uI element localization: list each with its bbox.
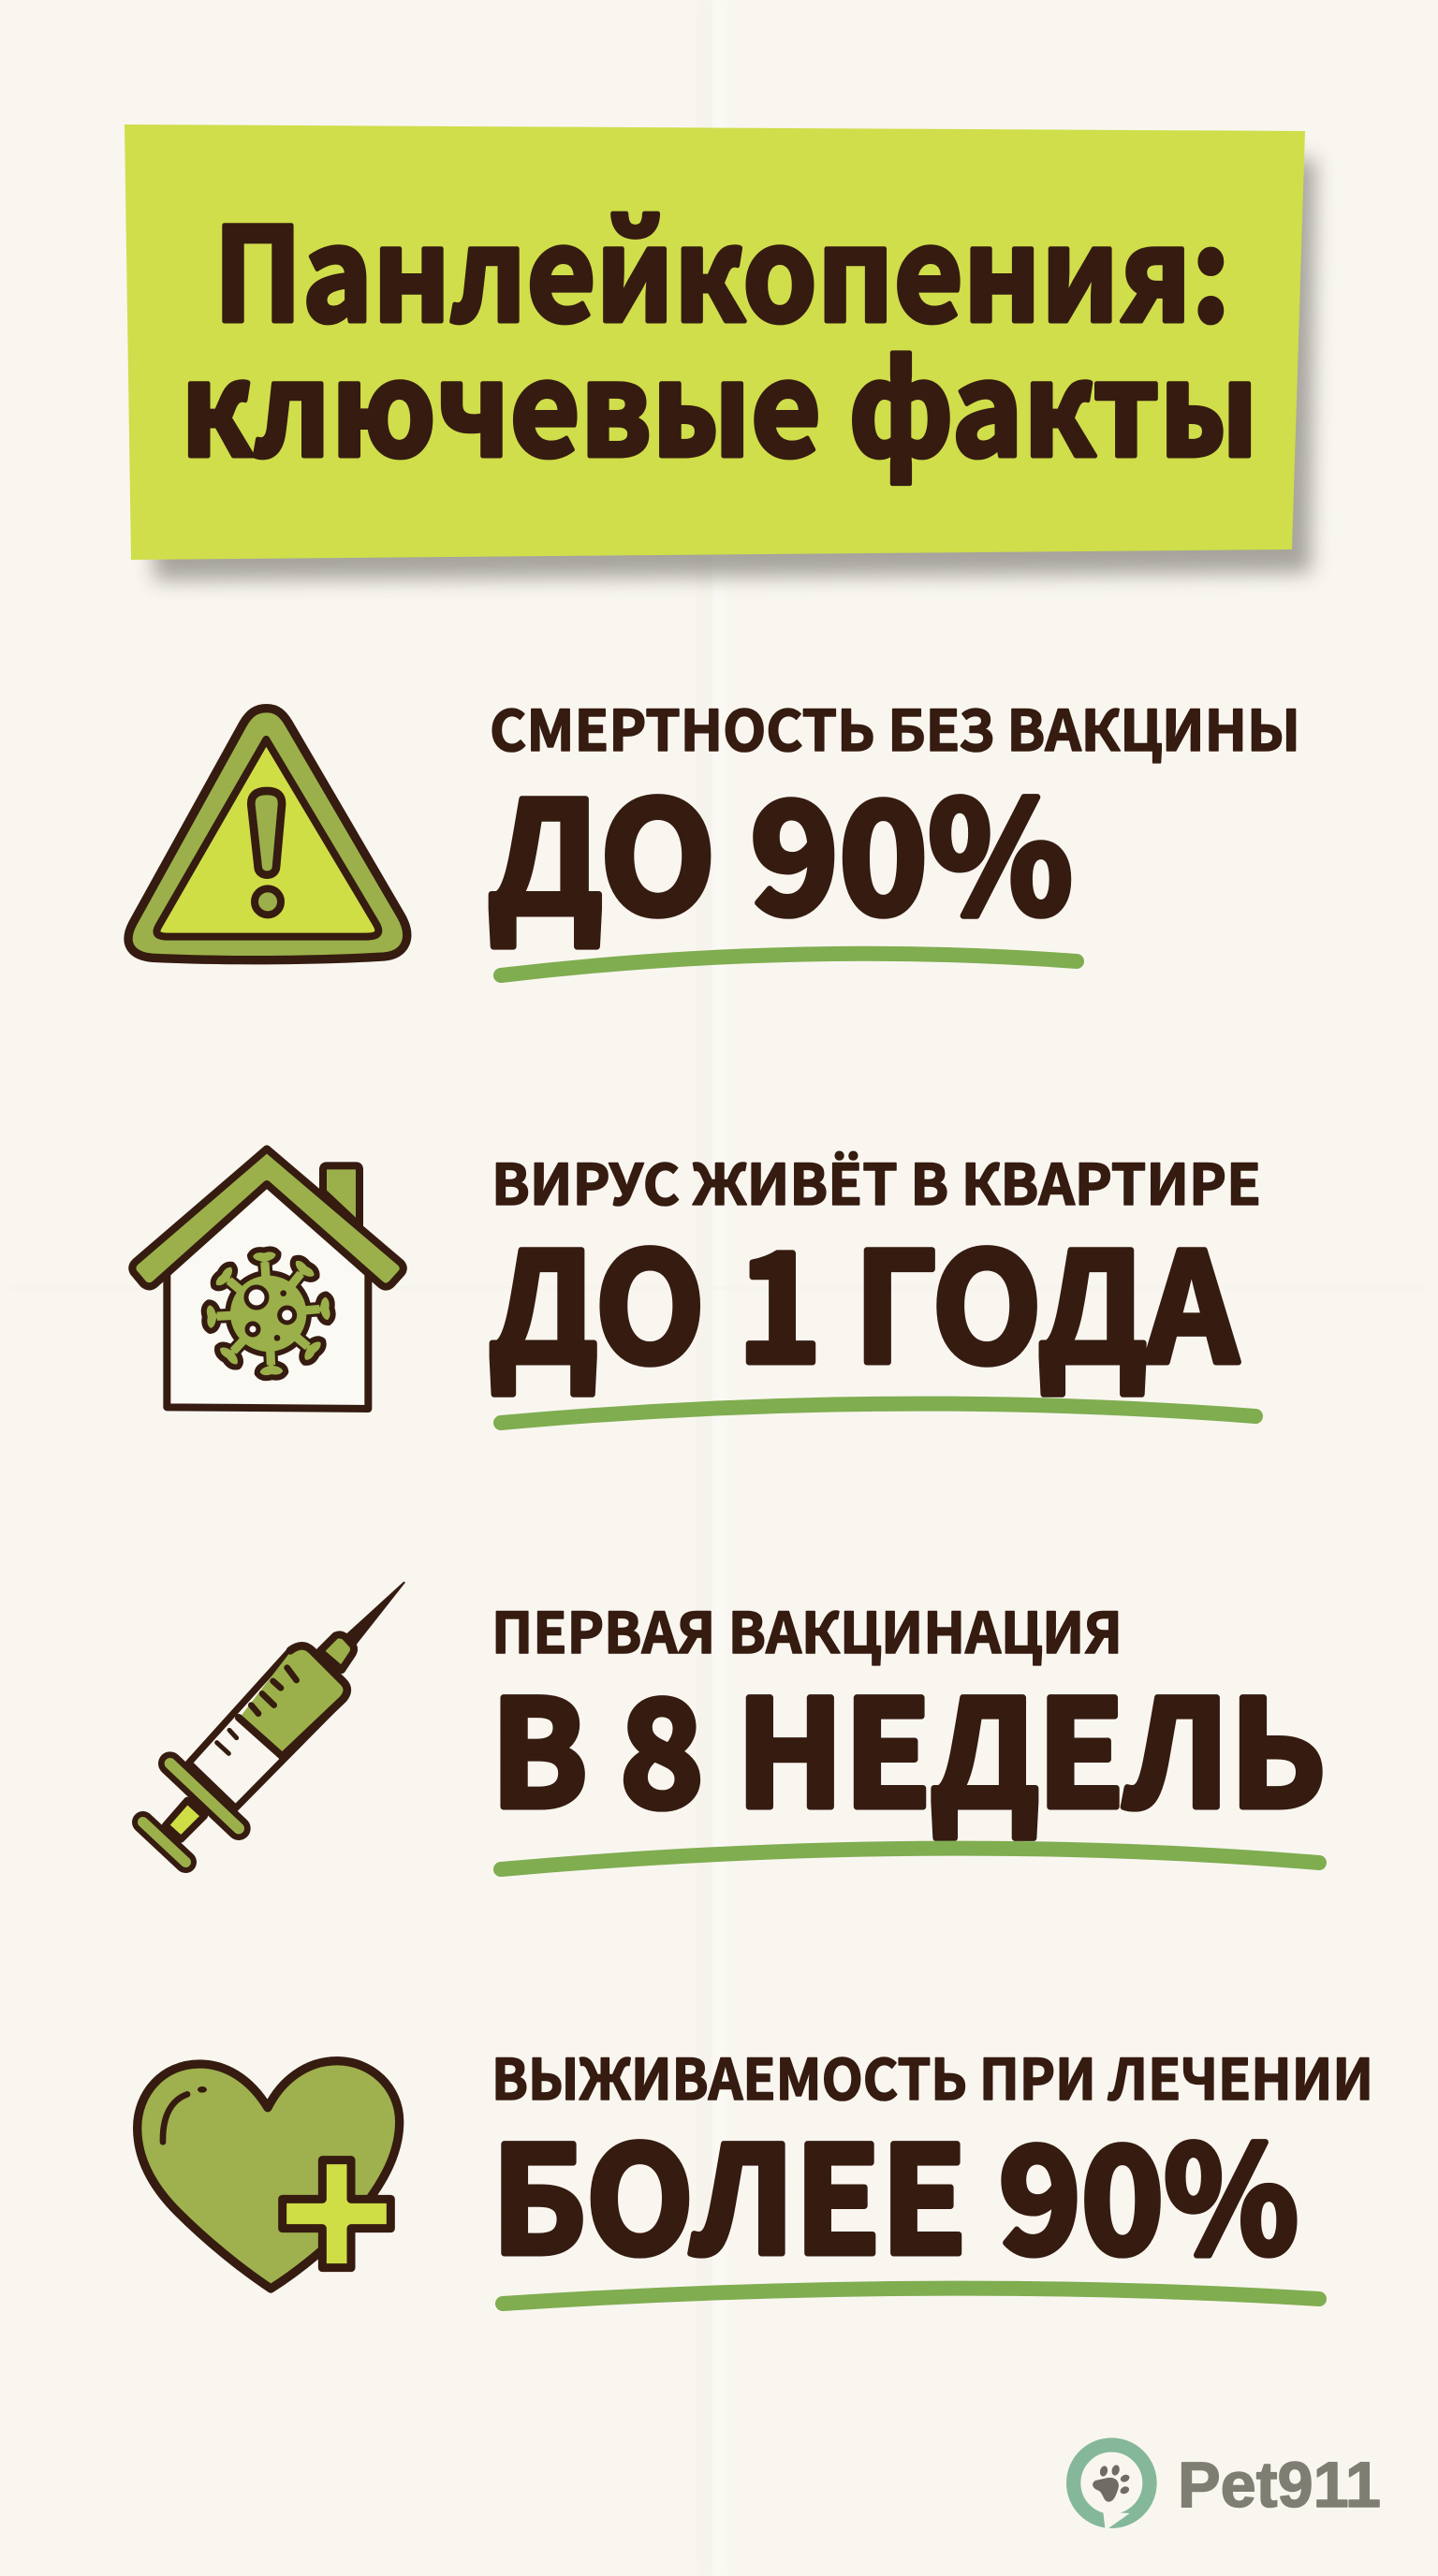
label: survival: ВЫЖИВАЕМОСТЬ ПРИ ЛЕЧЕНИИ bbox=[492, 2035, 1373, 2116]
label: virus lifetime: ВИРУС ЖИВЁТ В КВАРТИРЕ bbox=[492, 1140, 1261, 1222]
icon: warning triangle bbox=[128, 709, 407, 960]
icon: heart with plus bbox=[138, 2061, 400, 2289]
fact 4: survival bbox=[138, 2035, 1373, 2304]
title: Панлейкопения: bbox=[213, 171, 1230, 359]
value: at 8 weeks: В 8 НЕДЕЛЬ bbox=[491, 1637, 1326, 1850]
label: first vaccination: ПЕРВАЯ ВАКЦИНАЦИЯ bbox=[492, 1588, 1123, 1670]
underline bbox=[501, 1849, 1319, 1869]
fact 1: mortality bbox=[128, 686, 1300, 975]
value: up to 90%: ДО 90% bbox=[489, 735, 1073, 959]
label: mortality: СМЕРТНОСТЬ БЕЗ ВАКЦИНЫ bbox=[490, 686, 1300, 768]
logo: Pet911 bbox=[1074, 2445, 1381, 2530]
underline bbox=[501, 954, 1077, 975]
title: ключевые факты bbox=[181, 306, 1258, 493]
value: up to 1 year: ДО 1 ГОДА bbox=[490, 1188, 1239, 1406]
title bbox=[181, 171, 1258, 493]
underline bbox=[501, 1404, 1255, 1423]
fact 3: first vaccination bbox=[143, 1583, 1326, 1869]
icon: syringe bbox=[143, 1583, 404, 1862]
wordmark: Pet911 bbox=[1178, 2449, 1381, 2521]
icon: paw in speech ring bbox=[1074, 2445, 1150, 2530]
fact 2: virus lifetime bbox=[132, 1140, 1261, 1423]
title panel bbox=[125, 124, 1315, 580]
icon: house with virus bbox=[132, 1149, 404, 1409]
value: over 90%: БОЛЕЕ 90% bbox=[492, 2084, 1299, 2296]
underline bbox=[503, 2289, 1319, 2304]
